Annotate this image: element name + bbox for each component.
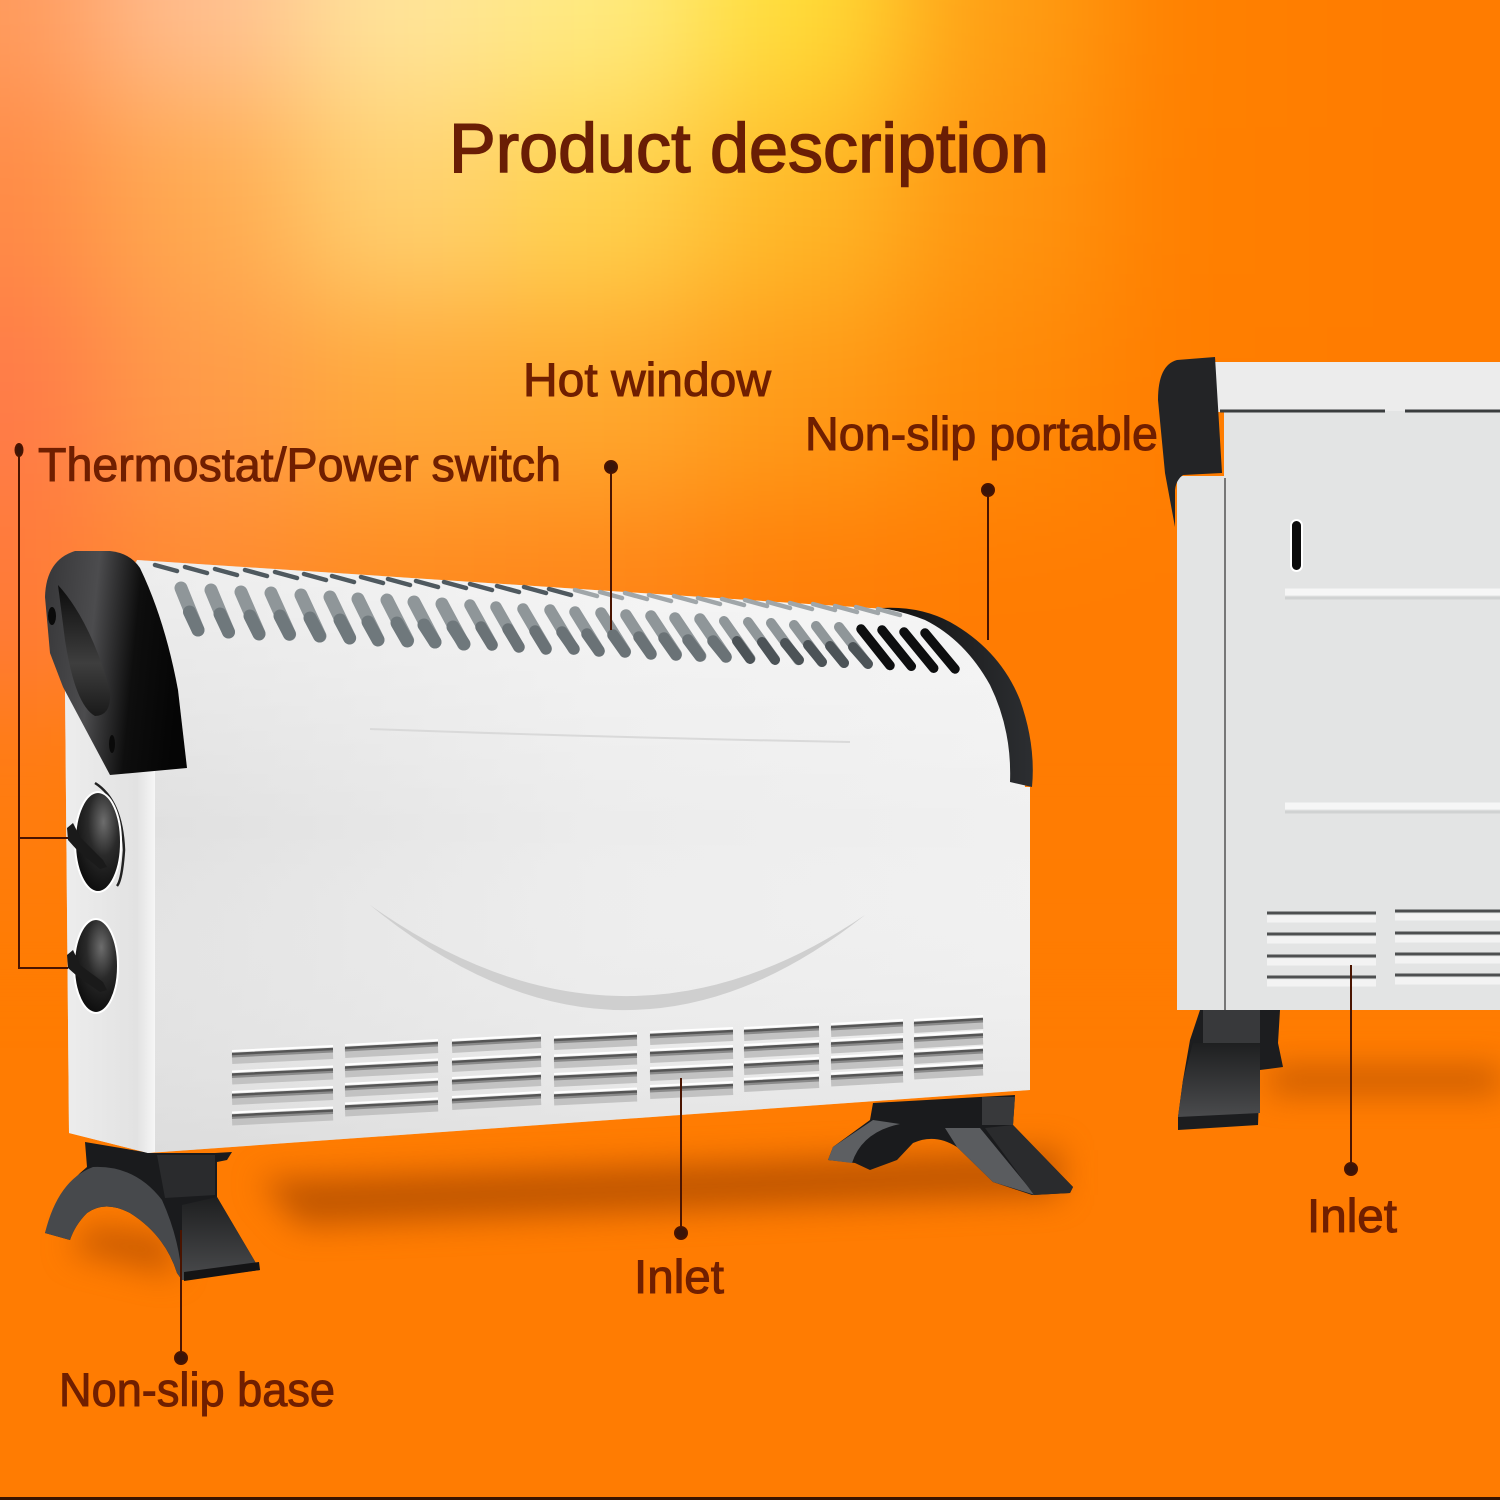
leader: inlet main: [675, 1078, 687, 1239]
label: non-slip portable: Non-slip portable: [805, 407, 1158, 460]
thermostat knob: [67, 783, 124, 892]
second heater panel creases: [1285, 592, 1500, 812]
leader: thermostat and power switch: [16, 444, 68, 968]
top slits: [155, 565, 900, 615]
right end cap: [882, 608, 1033, 787]
black carry handle: [45, 551, 187, 775]
label: thermostat/power switch: Thermostat/Power switch: [38, 438, 561, 491]
title: Product description: [449, 109, 1049, 187]
second heater louvers: [1267, 911, 1500, 983]
inlet louvers: [232, 1016, 983, 1120]
left foot: [45, 1142, 260, 1281]
right foot: [828, 1095, 1073, 1195]
leader: non-slip portable: [982, 484, 994, 640]
heater left side panel: [65, 685, 155, 1153]
second heater, right side: [1158, 357, 1500, 1130]
leader: non-slip base: [175, 1230, 187, 1364]
body crescent detail: [370, 905, 865, 1010]
main heater: [45, 551, 1073, 1281]
label: non-slip base: Non-slip base: [59, 1363, 335, 1416]
label: inlet second heater: Inlet: [1307, 1189, 1397, 1242]
heater front body: [65, 560, 1030, 1153]
power switch knob: [67, 919, 118, 1013]
second heater side strip: [1177, 476, 1225, 1010]
faint body line: [370, 729, 850, 742]
second heater slot: [1291, 520, 1302, 571]
second heater top band: [1214, 362, 1500, 412]
second heater front panel: [1224, 411, 1500, 1010]
leader: inlet second heater: [1345, 965, 1357, 1175]
bottom edge line: [0, 1497, 1500, 1500]
second heater black corner: [1158, 357, 1222, 527]
hot window vent slots: [181, 588, 955, 669]
second heater foot: [1178, 1010, 1283, 1130]
leader: hot window: [605, 461, 617, 630]
floor shadows: [70, 1068, 1500, 1275]
label: inlet: Inlet: [634, 1250, 724, 1303]
label: hot window: Hot window: [523, 353, 772, 406]
